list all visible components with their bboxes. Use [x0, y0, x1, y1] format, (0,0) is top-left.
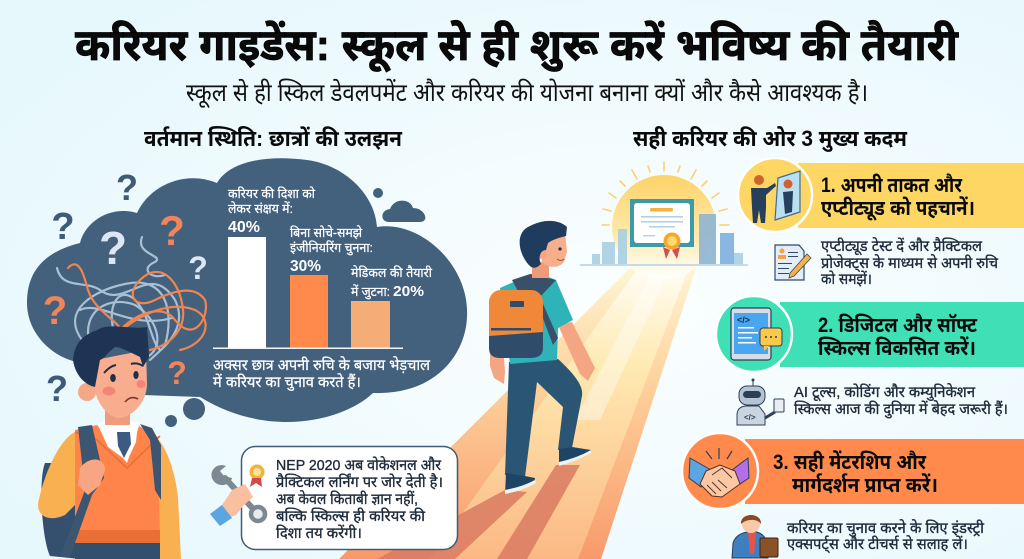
- illustration: boy walking toward goal: [489, 221, 595, 494]
- callout: NEP 2020: बल्कि स्किल्स ही करियर की: [276, 507, 426, 525]
- step 2 description: AI टूल्स, कोडिंग और कम्युनिकेशन: [794, 383, 976, 402]
- icon: tablet with code: </>: [737, 315, 750, 325]
- step 2 description: स्किल्स आज की दुनिया में बेहद जरूरी हैं।: [794, 400, 1008, 419]
- question marks: ?: [99, 222, 127, 274]
- step 2 title: [818, 313, 978, 360]
- bar label: 20%: 20%: [393, 283, 424, 300]
- chart caption: अक्सर छात्र अपनी रुचि के बजाय भेड़चाल: [213, 356, 431, 374]
- step 1 description: प्रोजेक्ट्स के माध्यम से अपनी रुचि: [821, 254, 998, 273]
- bar label: 40%: करियर की दिशा को: [228, 186, 316, 201]
- illustration: confused student: [38, 326, 181, 559]
- step 1 title: 1. अपनी ताकत और: [821, 173, 963, 197]
- icon: robot: [737, 378, 784, 425]
- step 1 description: एप्टीट्यूड टेस्ट दें और प्रैक्टिकल: [821, 237, 983, 256]
- step 1 description: को समझें।: [821, 270, 872, 288]
- step 2 banner: [716, 296, 1024, 372]
- bar label: 20%: [351, 265, 433, 300]
- step 2 title: स्किल्स विकसित करें।: [818, 336, 976, 360]
- callout: NEP 2020: दिशा तय करेंगी।: [276, 524, 362, 542]
- chart caption: में करियर का चुनाव करते हैं।: [213, 373, 361, 392]
- bar chart: [213, 186, 433, 349]
- step 1 title: एप्टीट्यूड को पहचानें।: [821, 196, 975, 221]
- career path road: [339, 265, 697, 559]
- bar label: 30%: [290, 225, 373, 275]
- step 3 description: एक्सपर्ट्स और टीचर्स से सलाह लें।: [787, 535, 968, 554]
- callout: NEP 2020: अब केवल किताबी ज्ञान नहीं,: [276, 490, 418, 508]
- step 2 description: [794, 383, 1008, 419]
- question marks: [43, 167, 208, 409]
- bar label: 40%: [228, 186, 316, 236]
- thought cloud: [27, 158, 467, 427]
- illustration: sun, certificate and city: [580, 162, 748, 279]
- step 3 title: मार्गदर्शन प्राप्त करें।: [792, 473, 938, 497]
- thought bubbles: [165, 398, 205, 427]
- question marks: ?: [46, 368, 68, 409]
- heading: three steps: सही करियर की ओर 3 मुख्य कदम: [633, 126, 908, 152]
- step 3 description: [787, 519, 985, 554]
- step 1 description: [821, 237, 998, 288]
- bar label: 30%: बिना सोचे-समझे: [290, 225, 363, 240]
- bar label: 40%: लेकर संक्षय में:: [228, 201, 293, 216]
- step 3 description: करियर का चुनाव करने के लिए इंडस्ट्री: [787, 519, 985, 538]
- step 3 banner: [682, 433, 1024, 509]
- icon: handshake: [682, 433, 758, 509]
- icon: robot: </>: [744, 413, 756, 422]
- step 2 title: 2. डिजिटल और सॉफ्ट: [818, 313, 978, 337]
- callout: NEP 2020: NEP 2020 अब वोकेशनल और: [276, 456, 442, 474]
- question marks: ?: [167, 355, 187, 391]
- bar label: 20%: में जुटना:: [351, 284, 390, 300]
- icon: tablet with code: [716, 296, 792, 372]
- icon: mentor with briefcase: [732, 515, 778, 558]
- title: करियर गाइडेंस: स्कूल से ही शुरू करें भविष्य की तैयारी: [75, 19, 959, 73]
- bar label: 40%: 40%: [228, 219, 260, 236]
- small cloud icon: [373, 188, 425, 222]
- step 1 title: [821, 173, 975, 221]
- chart caption: [213, 356, 431, 392]
- heading: current situation: वर्तमान स्थिति: छात्रों की उलझन: [144, 126, 402, 151]
- step 3 title: [773, 450, 938, 497]
- question marks: ?: [159, 207, 185, 254]
- question marks: ?: [116, 167, 138, 208]
- callout: NEP 2020: [242, 446, 458, 550]
- icon: wrench and hand with medal: [210, 464, 265, 526]
- question marks: ?: [51, 206, 75, 248]
- step 1 banner: [738, 158, 1024, 232]
- icon: person with mirror: [738, 158, 812, 232]
- question marks: ?: [188, 250, 208, 286]
- question marks: ?: [43, 289, 67, 333]
- bar label: 20%: मेडिकल की तैयारी: [351, 265, 433, 280]
- bar label: 30%: 30%: [290, 258, 321, 275]
- step 3 title: 3. सही मेंटरशिप और: [773, 450, 927, 474]
- bar label: 30%: इंजीनियरिंग चुनना:: [290, 240, 373, 256]
- tangled thoughts: [57, 237, 206, 360]
- icon: aptitude test sheet: [775, 245, 811, 280]
- callout: NEP 2020: प्रैक्टिकल लर्निंग पर जोर देती है।: [276, 473, 443, 491]
- subtitle: स्कूल से ही स्किल डेवलपमेंट और करियर की योजना बनाना क्यों और कैसे आवश्यक है।: [186, 77, 868, 108]
